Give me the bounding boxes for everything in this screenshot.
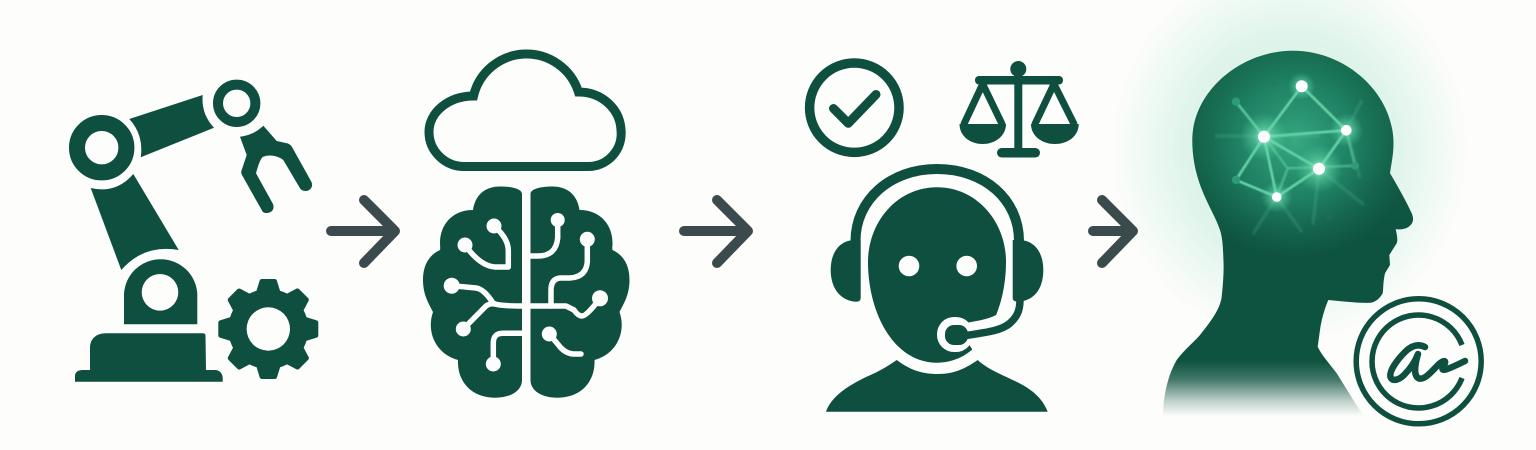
- robot shoulder joint: [77, 123, 126, 172]
- right ear cup: [1013, 240, 1043, 302]
- robot upper arm: [129, 95, 214, 157]
- brain circuit traces: [452, 220, 600, 364]
- icon: circuit brain: [423, 186, 630, 398]
- icon: scales of justice: [960, 61, 1079, 158]
- icon: robot arm: [75, 85, 312, 382]
- eyes: [899, 256, 919, 276]
- faint nodes: [1232, 98, 1359, 184]
- icon: head silhouette with neural network: [1163, 50, 1414, 414]
- icon: gear: [218, 279, 318, 379]
- icon: check mark badge: [810, 63, 899, 152]
- icon: signature seal: [1356, 299, 1481, 424]
- robot gripper: [240, 126, 312, 213]
- head silhouette: [1163, 50, 1414, 414]
- shoulders: [826, 360, 1048, 412]
- robot base joint: [124, 259, 197, 324]
- bright nodes: [1258, 80, 1352, 202]
- network edges: [1236, 86, 1355, 197]
- brain left hemisphere: [423, 186, 522, 398]
- arrow 1: [331, 200, 395, 263]
- headset band: [856, 169, 1019, 241]
- left ear cup: [831, 240, 861, 302]
- microphone: [945, 325, 968, 345]
- microphone boom cut-out: [937, 306, 1017, 362]
- icon: person with headset: [826, 169, 1048, 412]
- face: [868, 187, 1006, 363]
- node halos: [1240, 72, 1363, 213]
- network glow: [1196, 50, 1394, 244]
- arrow 2: [684, 200, 748, 263]
- microphone boom: [966, 300, 1020, 336]
- brain circuit nodes: [444, 213, 608, 372]
- icon: cloud: [429, 54, 621, 167]
- brain right hemisphere: [530, 186, 630, 398]
- arrow 3: [1093, 200, 1133, 263]
- robot pedestal: [75, 333, 223, 382]
- robot wrist joint: [218, 85, 255, 122]
- light rays: [1215, 100, 1364, 234]
- glow behind head: [1105, 0, 1475, 345]
- robot lower arm: [91, 174, 179, 270]
